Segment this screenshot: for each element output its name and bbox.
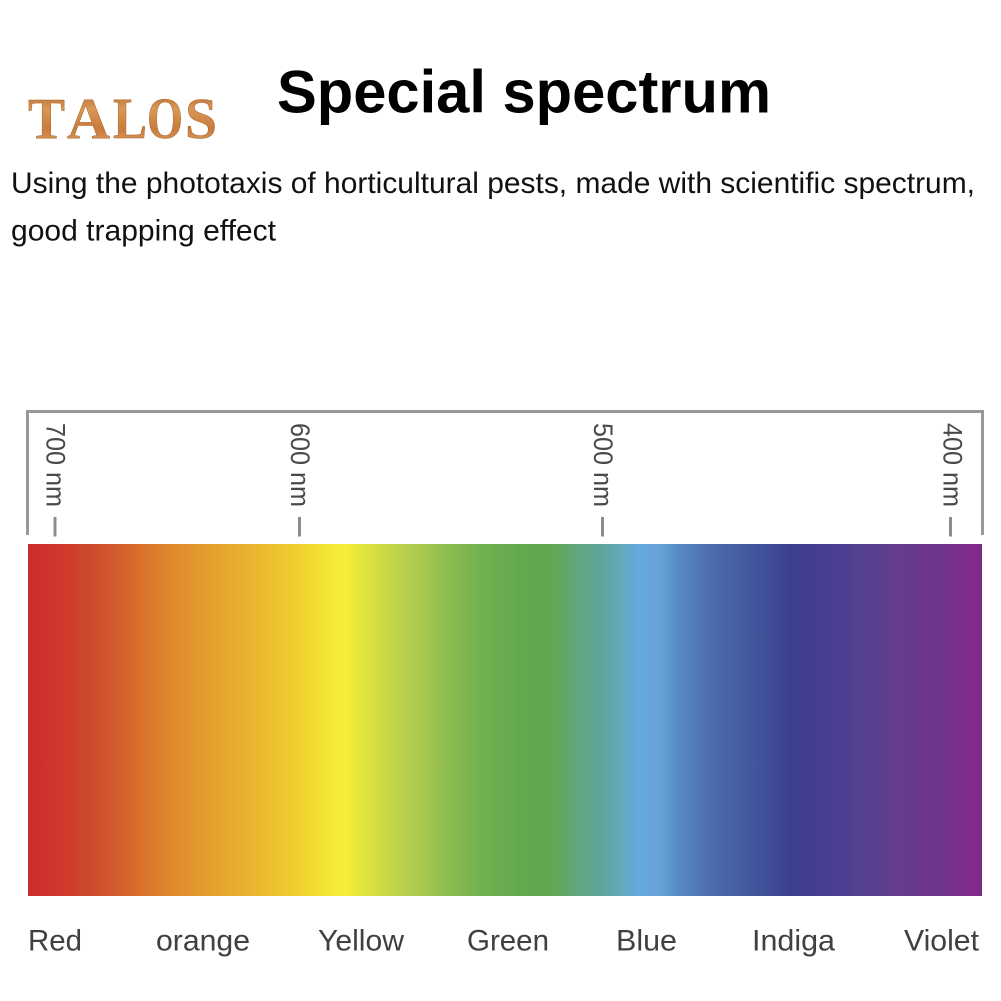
description text: good trapping effect xyxy=(11,214,277,248)
logo: TALOS: L xyxy=(113,86,147,151)
colour name: Violet: Violet xyxy=(904,924,980,958)
colour name: Yellow: Yellow xyxy=(318,924,404,958)
colour name: Red: Red xyxy=(28,924,82,958)
logo: TALOS xyxy=(28,86,217,151)
colour name: Indiga: Indiga xyxy=(752,924,835,958)
colour name: Green: Green xyxy=(467,924,549,958)
colour name: orange: orange xyxy=(156,924,250,958)
wavelength labels and ticks xyxy=(40,423,968,536)
logo: TALOS: T xyxy=(28,86,65,151)
spectrum bar xyxy=(28,544,982,896)
label: 700 nm: 700 nm xyxy=(40,423,70,507)
label: 600 nm: 600 nm xyxy=(285,423,315,507)
logo: TALOS: S xyxy=(185,86,217,151)
colour names xyxy=(28,924,980,958)
title: Special spectrum xyxy=(277,58,771,126)
label: 500 nm: 500 nm xyxy=(588,423,618,507)
label: 400 nm: 400 nm xyxy=(938,423,968,507)
description text: Using the phototaxis of horticultural pests, made with scientific spectrum, xyxy=(11,167,975,200)
logo: TALOS: A xyxy=(67,86,110,151)
logo: TALOS: O xyxy=(147,86,183,151)
colour name: Blue: Blue xyxy=(616,924,677,958)
description text xyxy=(11,167,975,248)
wavelength scale bracket xyxy=(28,412,982,535)
